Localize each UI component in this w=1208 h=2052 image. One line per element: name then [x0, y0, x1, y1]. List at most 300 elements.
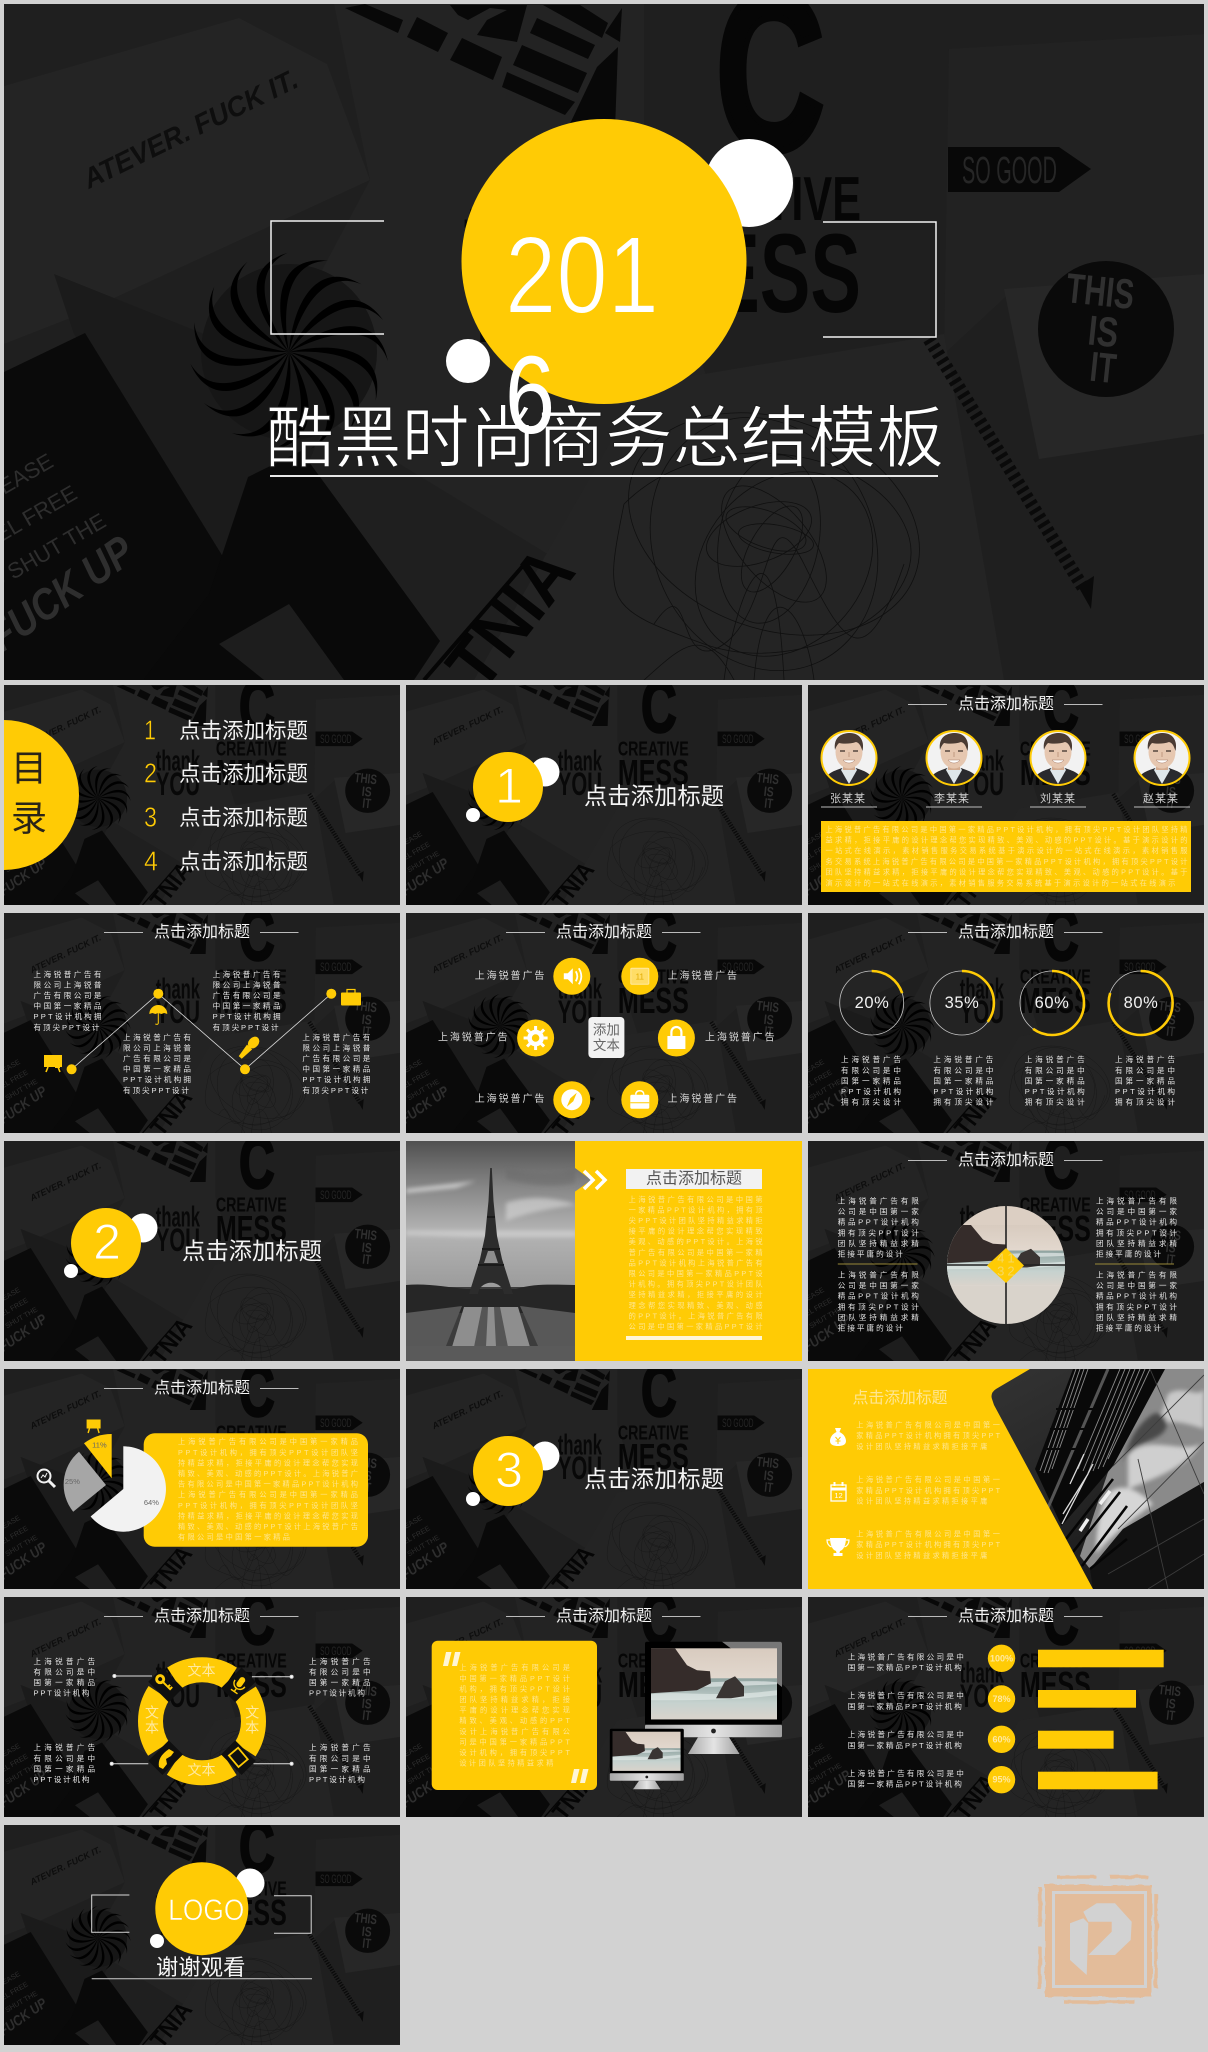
- circular sea photo with diamond: 3: [997, 1264, 1004, 1278]
- icon: microphone: [229, 1674, 249, 1695]
- row 95%: 上海锐普广告有限公司是中: [848, 1768, 964, 1778]
- panel title: [626, 1169, 762, 1189]
- right text: 公司是中国第一家: [1096, 1280, 1177, 1290]
- icon: phone: [159, 1749, 174, 1769]
- yellow description box: 益求精，拒接平庸的设计理念帮您实现精致、美观、动感的PPT设计。基于演示设计的: [826, 836, 1187, 845]
- yellow quote box: 精致、美观、动感的PPT: [459, 1716, 571, 1725]
- text block 1: 限公司上海锐普: [34, 979, 102, 989]
- text top right: 国第一家精品: [309, 1677, 371, 1687]
- header: 点击添加标题: [154, 1607, 250, 1625]
- right text: 拒接平庸的设计: [1096, 1248, 1161, 1258]
- text block 3: 上海锐普广告有: [213, 969, 281, 979]
- photo: glass building: [808, 1369, 1204, 1589]
- text bottom left: [34, 1742, 96, 1784]
- segmented ring: 本: [145, 1719, 159, 1735]
- icon: money bag: [830, 1428, 846, 1446]
- ring captions: 国第一家精品: [841, 1075, 901, 1085]
- ring 80%: 80%: [1124, 994, 1158, 1012]
- icon: gear: [517, 1020, 554, 1056]
- yellow description box: 上海锐普广告有限公司是中国第一家精品PPT设计机构，拥有顶尖PPT设计团队坚持精: [826, 825, 1187, 834]
- text bottom right: [309, 1742, 371, 1784]
- row 95%: 95%: [992, 1775, 1011, 1785]
- ring captions: [841, 1054, 1175, 1107]
- ring captions: PPT设计机构: [1115, 1086, 1175, 1096]
- segmented ring: 文本: [188, 1663, 216, 1679]
- text block 2: 设计团队坚持精益求精拒接平庸: [856, 1496, 987, 1505]
- text block 4: PPT设计机构拥: [302, 1074, 371, 1084]
- yellow text box: PPT设计机构，拥有顶尖PPT设计团队坚: [178, 1501, 358, 1510]
- yellow quote box: 司是中国第一家精品PPT: [459, 1737, 571, 1746]
- icon: key: [155, 1674, 173, 1692]
- yellow quote box: 设计机构，拥有顶尖PPT: [459, 1748, 571, 1757]
- yellow panel: [575, 1141, 802, 1361]
- text block 2: 上海锐普广告有限公司是中国第一: [856, 1475, 1000, 1484]
- header: 点击添加标题: [958, 923, 1054, 941]
- yellow circle: [462, 119, 746, 404]
- text block 2: 有顶尖PPT设计: [123, 1085, 189, 1095]
- yellow text box: [144, 1433, 368, 1547]
- text block 1: 上海锐普广告有: [34, 969, 102, 979]
- ring captions: 国第一家精品: [1115, 1075, 1175, 1085]
- ring captions: 国第一家精品: [1025, 1075, 1085, 1085]
- row 60%: 国第一家精品PPT设计机构: [848, 1740, 962, 1750]
- section badge: 1: [495, 758, 523, 814]
- yellow text box: PPT设计机构，拥有顶尖PPT设计团队坚: [178, 1448, 358, 1457]
- yellow text box: 精致、美观、动感的PPT设计。上海锐普广: [178, 1469, 358, 1478]
- row 100%: 上海锐普广告有限公司是中: [848, 1652, 964, 1662]
- left text: 精品PPT设计机构: [838, 1291, 919, 1301]
- text block 4: 有顶尖PPT设计: [302, 1085, 369, 1095]
- circular sea photo with diamond: 4: [997, 1250, 1004, 1266]
- yellow quote box: 团队坚持精益求精，拒接: [459, 1695, 570, 1704]
- year number: 6: [505, 334, 555, 457]
- text bottom left: 有限公司是中: [34, 1753, 95, 1763]
- labels: 上海锐普广告: [475, 969, 544, 982]
- right text: 精品PPT设计机构: [1096, 1217, 1177, 1227]
- panel body text: 接平庸的设计理念帮您实现精致: [629, 1227, 763, 1236]
- photo: eiffel tower: [406, 1141, 596, 1361]
- yellow description box: 务交易系统上海锐普广告有限公司是中国第一家精品PPT设计机构，拥有顶尖PPT设计: [826, 857, 1187, 866]
- row 95%: 国第一家精品PPT设计机构: [848, 1779, 962, 1789]
- year number: [505, 214, 659, 457]
- row 100%: 100%: [990, 1653, 1013, 1663]
- icon: presentation board: [44, 1055, 62, 1072]
- icon: calendar: [621, 958, 658, 995]
- text top left: 有限公司是中: [34, 1666, 95, 1676]
- right text: 团队坚持精益求精: [1096, 1312, 1177, 1322]
- text block 1: 中国第一家精品: [34, 1001, 102, 1011]
- slide: percentage bars: [808, 1597, 1204, 1817]
- year number: 201: [505, 214, 659, 337]
- yellow text box: 持精益求精，拒接平庸的设计理念帮您实现: [178, 1458, 358, 1467]
- left bracket frame: [271, 221, 384, 334]
- right bracket frame: [823, 222, 936, 337]
- panel body text: 尖PPT设计团队坚持精益求精拒: [629, 1216, 763, 1225]
- text block 4: 中国第一家精品: [302, 1064, 371, 1074]
- header: 点击添加标题: [556, 923, 652, 941]
- text block 3: 限公司上海锐普: [213, 979, 281, 989]
- slide: cover: [4, 4, 1204, 680]
- text block 1: PPT设计机构拥: [34, 1011, 102, 1021]
- header: 点击添加标题: [556, 1607, 652, 1625]
- text top right: 有限公司是中: [309, 1666, 371, 1676]
- text block 2: 上海锐普广告有: [123, 1032, 191, 1042]
- section badge: [64, 1208, 158, 1278]
- row 60%: [848, 1726, 1114, 1753]
- icon: calendar: [831, 1482, 846, 1501]
- left text: [838, 1196, 919, 1332]
- right text: 上海锐普广告有限: [1096, 1196, 1177, 1206]
- slide: segmented ring: [4, 1597, 400, 1817]
- right text: 拥有顶尖PPT设计: [1096, 1227, 1177, 1237]
- text block 1: 有顶尖PPT设计: [34, 1022, 100, 1032]
- ring 80%: [1109, 971, 1173, 1035]
- title underline: [270, 475, 938, 477]
- names: 赵某某: [1143, 791, 1179, 805]
- panel body text: 普广告有限公司是中国第一家精: [629, 1248, 763, 1257]
- portraits: [821, 730, 1190, 786]
- icon: magnifier: [38, 1470, 55, 1487]
- right text: 团队坚持精益求精: [1096, 1238, 1177, 1248]
- text bottom right: 国第一家精品: [309, 1763, 371, 1773]
- left text: 精品PPT设计机构: [838, 1217, 919, 1227]
- slide: agenda: [4, 685, 400, 905]
- circular sea photo with diamond: 2: [1007, 1264, 1015, 1278]
- row 95%: [848, 1766, 1158, 1793]
- text block 3: 上海锐普广告有限公司是中国第一: [856, 1530, 1000, 1538]
- text top right: PPT设计机构: [309, 1688, 365, 1698]
- slide: building photo: [808, 1369, 1204, 1589]
- slide: section 1: [406, 685, 802, 905]
- yellow description box: 一站式在线演示，素材销售服务交易系统基于演示设计的一站式在线演示，素材销售服: [826, 846, 1187, 855]
- pie chart: 25%: [65, 1477, 80, 1486]
- slide: zigzag timeline: [4, 913, 400, 1133]
- ring captions: PPT设计机构: [841, 1086, 901, 1096]
- text block 3: 广告有限公司是: [213, 990, 281, 1000]
- text block 4: 限公司上海锐普: [302, 1042, 371, 1052]
- text block 2: 限公司上海锐普: [123, 1042, 191, 1052]
- ring captions: 上海锐普广告: [933, 1054, 994, 1064]
- panel body text: 上海锐普广告有限公司是中国第: [629, 1195, 763, 1204]
- yellow text box: 有限公司是中国第一家精品: [178, 1533, 290, 1542]
- text top left: 国第一家精品: [34, 1677, 96, 1687]
- icon: lock: [658, 1020, 695, 1056]
- icon: double chevron: [584, 1171, 605, 1189]
- yellow quote box: 设计上海锐普广告有限公: [459, 1727, 570, 1736]
- text top left: PPT设计机构: [34, 1688, 90, 1698]
- text top left: [34, 1656, 96, 1698]
- yellow text box: 上海锐普广告有限公司是中国第一家精品: [178, 1437, 358, 1446]
- ring 20%: 20%: [855, 994, 889, 1012]
- text block 3: [856, 1530, 1001, 1560]
- ring captions: 拥有顶尖设计: [841, 1097, 901, 1107]
- row 100%: [848, 1645, 1164, 1672]
- yellow description box: [821, 821, 1191, 892]
- left text: 上海锐普广告有限: [838, 1270, 919, 1280]
- icon: tablet: [229, 1748, 248, 1767]
- agenda list: 4: [144, 846, 158, 876]
- left text: 团队坚持精益求精: [838, 1238, 919, 1248]
- text bottom right: 上海锐普广告: [309, 1742, 371, 1752]
- panel body text: 计机构。拥有顶尖PPT设计团队: [629, 1280, 763, 1289]
- zigzag line with dots: [67, 989, 336, 1074]
- icon: calendar: 11: [636, 972, 644, 981]
- section title: 点击添加标题: [584, 1466, 724, 1492]
- text block 2: [123, 1032, 191, 1095]
- panel title: 点击添加标题: [852, 1389, 948, 1407]
- text block 2: PPT设计机构拥: [123, 1074, 191, 1084]
- slide: section 2: [4, 1141, 400, 1361]
- text bottom right: PPT设计机构: [309, 1774, 365, 1784]
- left text: 拥有顶尖PPT设计: [838, 1227, 919, 1237]
- yellow text box: 持精益求精，拒接平庸的设计理念帮您实现: [178, 1511, 358, 1520]
- labels: 上海锐普广告: [705, 1030, 775, 1044]
- header: 点击添加标题: [154, 1379, 250, 1397]
- ring 35%: 35%: [945, 994, 979, 1012]
- row 78%: 国第一家精品PPT设计机构: [848, 1701, 962, 1711]
- pie chart: 64%: [144, 1498, 159, 1507]
- agenda list: 1: [144, 714, 156, 746]
- ring captions: 拥有顶尖设计: [933, 1097, 994, 1107]
- watermark stamp: [1040, 1877, 1156, 2002]
- agenda list: 点击添加标题: [179, 850, 308, 874]
- yellow quote box: 设计团队坚持精益求精: [459, 1759, 553, 1768]
- text block 3: 设计团队坚持精益求精拒接平庸: [856, 1551, 987, 1560]
- left text: 公司是中国第一家: [838, 1280, 919, 1290]
- yellow quote box: 上海锐普广告有限公司是: [459, 1663, 570, 1672]
- header: 点击添加标题: [958, 1607, 1054, 1625]
- section badge: 2: [93, 1214, 121, 1270]
- panel body text: 理念帮您实现精致、美观、动感: [629, 1301, 763, 1310]
- text block 3: [213, 969, 281, 1032]
- ring captions: 上海锐普广告: [1025, 1054, 1085, 1064]
- yellow logo circle: LOGO: [168, 1894, 244, 1927]
- left text: 公司是中国第一家: [838, 1206, 919, 1216]
- text block 3: 有顶尖PPT设计: [213, 1022, 279, 1032]
- slide: eiffel photo and text: [406, 1141, 802, 1361]
- section badge: [466, 752, 560, 822]
- text block 4: [302, 1032, 371, 1095]
- yellow half circle with 目录: 录: [11, 798, 47, 838]
- slide: circle photo: [808, 1141, 1204, 1361]
- icon: speaker: [553, 958, 590, 995]
- agenda list: [144, 714, 308, 876]
- segmented ring: [131, 1650, 273, 1793]
- yellow text box: 精致、美观、动感的PPT设计上海锐普广告: [178, 1522, 358, 1531]
- panel body text: 一家精品PPT设计机构，拥有顶: [629, 1205, 763, 1214]
- ring captions: 拥有顶尖设计: [1025, 1097, 1085, 1107]
- ring 20%: [840, 971, 904, 1035]
- text block 2: [856, 1475, 1001, 1506]
- panel body text: 公司是中国第一家精品PPT设计: [629, 1322, 763, 1331]
- ring captions: 有限公司是中: [841, 1065, 901, 1075]
- center box: [588, 1017, 624, 1058]
- labels: 上海锐普广告: [668, 1092, 737, 1105]
- white circle: small: [150, 1934, 164, 1948]
- names: 张某某: [830, 792, 866, 805]
- closing underline: [92, 1978, 312, 1980]
- right bracket frame: [274, 1896, 311, 1933]
- text block 1: 广告有限公司是: [34, 990, 102, 1000]
- ring captions: 有限公司是中: [1025, 1065, 1085, 1075]
- row 100%: 国第一家精品PPT设计机构: [848, 1662, 962, 1672]
- slide: section 3: [406, 1369, 802, 1589]
- text block 3: PPT设计机构拥: [213, 1011, 281, 1021]
- text block 3: 中国第一家精品: [213, 1001, 281, 1011]
- right text: 拒接平庸的设计: [1096, 1322, 1161, 1332]
- closing title: 谢谢观看: [156, 1955, 245, 1980]
- header: 点击添加标题: [958, 1151, 1054, 1169]
- left bracket frame: [92, 1895, 129, 1932]
- center box: 添加: [593, 1022, 620, 1038]
- yellow half circle with 目录: [0, 720, 79, 870]
- agenda list: 3: [144, 802, 157, 832]
- text bottom left: 国第一家精品: [34, 1763, 96, 1773]
- text top right: [309, 1656, 371, 1698]
- agenda list: 2: [144, 758, 157, 788]
- panel body text: [629, 1195, 763, 1331]
- yellow text box: 上海锐普广告有限公司是中国第一家精品: [178, 1490, 358, 1499]
- labels: [438, 969, 775, 1105]
- ring captions: 有限公司是中: [933, 1065, 993, 1075]
- ring 60%: 60%: [1035, 994, 1069, 1012]
- text top left: 上海锐普广告: [34, 1656, 96, 1666]
- text block 1: 家精品PPT设计机构拥有顶尖PPT: [856, 1431, 1001, 1440]
- left text: 团队坚持精益求精: [838, 1312, 919, 1322]
- icon: compass: [553, 1081, 590, 1118]
- text block 2: 中国第一家精品: [123, 1064, 191, 1074]
- yellow text box: 告有限公司是中国第一家精品PPT设计机构: [178, 1480, 358, 1489]
- ring captions: PPT设计机构: [933, 1086, 994, 1096]
- agenda list: 点击添加标题: [179, 719, 308, 743]
- text bottom left: PPT设计机构: [34, 1774, 90, 1784]
- ring 60%: [1020, 971, 1084, 1035]
- names: [821, 791, 1190, 807]
- ring 35%: [930, 971, 994, 1035]
- left text: 拒接平庸的设计: [838, 1322, 903, 1332]
- panel body text: 品PPT设计机构上海锐普广告有: [629, 1258, 763, 1267]
- leader lines: [110, 1674, 293, 1765]
- ring captions: 有限公司是中: [1115, 1065, 1175, 1075]
- left text: 上海锐普广告有限: [838, 1196, 919, 1206]
- text block 4: 广告有限公司是: [302, 1053, 371, 1063]
- slide: icon hub: [406, 913, 802, 1133]
- ring captions: 上海锐普广告: [1115, 1054, 1175, 1064]
- row 78%: 78%: [992, 1694, 1011, 1704]
- icon: umbrella: [149, 1005, 167, 1024]
- ring captions: 拥有顶尖设计: [1115, 1097, 1175, 1107]
- row 78%: 上海锐普广告有限公司是中: [848, 1690, 964, 1700]
- text block 2: 家精品PPT设计机构拥有顶尖PPT: [856, 1486, 1001, 1495]
- icon: microphone: [237, 1034, 262, 1061]
- left text: 拥有顶尖PPT设计: [838, 1301, 919, 1311]
- icon: bag: [621, 1081, 658, 1118]
- yellow quote box: 平庸的设计理念帮您实现: [459, 1706, 570, 1715]
- pie chart: 11%: [92, 1440, 107, 1450]
- small monitor: [610, 1729, 684, 1789]
- circular sea photo with diamond: [947, 1206, 1065, 1324]
- row 78%: [848, 1685, 1136, 1713]
- row 60%: 上海锐普广告有限公司是中: [848, 1729, 964, 1739]
- right text: 公司是中国第一家: [1096, 1206, 1177, 1216]
- labels: 上海锐普广告: [438, 1030, 508, 1044]
- text block 1: 上海锐普广告有限公司是中国第一: [856, 1420, 1000, 1430]
- panel bottom bar: [626, 1336, 762, 1340]
- text top right: 上海锐普广告: [309, 1656, 371, 1666]
- section badge: [466, 1436, 560, 1506]
- yellow description box: 演示设计的一站式在线演示，素材销售服务交易系统基于演示设计的一站式在线演示: [826, 878, 1176, 887]
- yellow quote box: 中国第一家精品PPT设计: [459, 1674, 570, 1683]
- panel body text: 美观、动感的PPT设计。上海锐: [629, 1237, 763, 1246]
- icon: trophy: [827, 1538, 849, 1556]
- text block 1: [856, 1420, 1001, 1451]
- ring captions: 上海锐普广告: [841, 1054, 901, 1064]
- text bottom right: 有限公司是中: [309, 1753, 371, 1763]
- section badge: 3: [495, 1442, 523, 1498]
- text block 3: 家精品PPT设计机构拥有顶尖PPT: [856, 1540, 1001, 1549]
- right text: 上海锐普广告有限: [1096, 1270, 1177, 1280]
- slide: pie chart: [4, 1369, 400, 1589]
- text bottom left: 上海锐普广告: [34, 1742, 96, 1752]
- white circle: upper right: [705, 139, 793, 227]
- text block 1: 设计团队坚持精益求精拒接平庸: [856, 1442, 987, 1451]
- slide: progress rings: [808, 913, 1204, 1133]
- row 60%: 60%: [992, 1734, 1011, 1744]
- yellow quote box: 机构，拥有顶尖PPT设计: [459, 1684, 570, 1693]
- text block 4: 上海锐普广告有: [302, 1032, 371, 1042]
- white circle: upper right: [236, 1868, 264, 1898]
- icon: presentation board: [87, 1420, 101, 1433]
- slide: quote and monitors: [406, 1597, 802, 1817]
- header: 点击添加标题: [154, 923, 250, 941]
- section title: 点击添加标题: [182, 1238, 322, 1264]
- ring captions: PPT设计机构: [1025, 1086, 1085, 1096]
- agenda list: 点击添加标题: [179, 762, 308, 786]
- names: 刘某某: [1040, 792, 1076, 805]
- section title: 点击添加标题: [584, 783, 724, 809]
- segmented ring: 文本: [188, 1762, 216, 1778]
- text block 1: [34, 969, 102, 1032]
- icon: calendar: 12: [834, 1491, 843, 1500]
- header: 点击添加标题: [958, 695, 1054, 713]
- icon: briefcase: [341, 990, 361, 1006]
- pie chart: [64, 1434, 166, 1532]
- ring captions: 国第一家精品: [933, 1075, 994, 1085]
- large monitor: [645, 1642, 782, 1754]
- text block 2: 广告有限公司是: [123, 1053, 191, 1063]
- yellow panel: [808, 1369, 1093, 1589]
- segmented ring: 文: [245, 1705, 259, 1721]
- yellow half circle with 目录: 目: [11, 748, 47, 788]
- panel body text: 坚持精益求精，拒接平庸的设计: [629, 1290, 763, 1299]
- right text: 精品PPT设计机构: [1096, 1291, 1177, 1301]
- labels: 上海锐普广告: [668, 969, 737, 982]
- yellow logo circle: [155, 1862, 248, 1955]
- title: 酷黑时尚商务总结模板: [266, 402, 944, 476]
- segmented ring: 本: [245, 1719, 259, 1735]
- names: 李某某: [934, 791, 970, 805]
- right text: [1095, 1196, 1177, 1332]
- segmented ring: 文: [145, 1705, 159, 1721]
- panel body text: 限公司是中国第一家精品PPT设: [629, 1269, 763, 1278]
- agenda list: 点击添加标题: [179, 806, 308, 830]
- right text: 拥有顶尖PPT设计: [1096, 1301, 1177, 1311]
- slide: team: [808, 685, 1204, 905]
- left text: 拒接平庸的设计: [838, 1248, 903, 1258]
- labels: 上海锐普广告: [475, 1092, 544, 1105]
- yellow quote box: [432, 1641, 597, 1790]
- panel title: 点击添加标题: [646, 1170, 742, 1188]
